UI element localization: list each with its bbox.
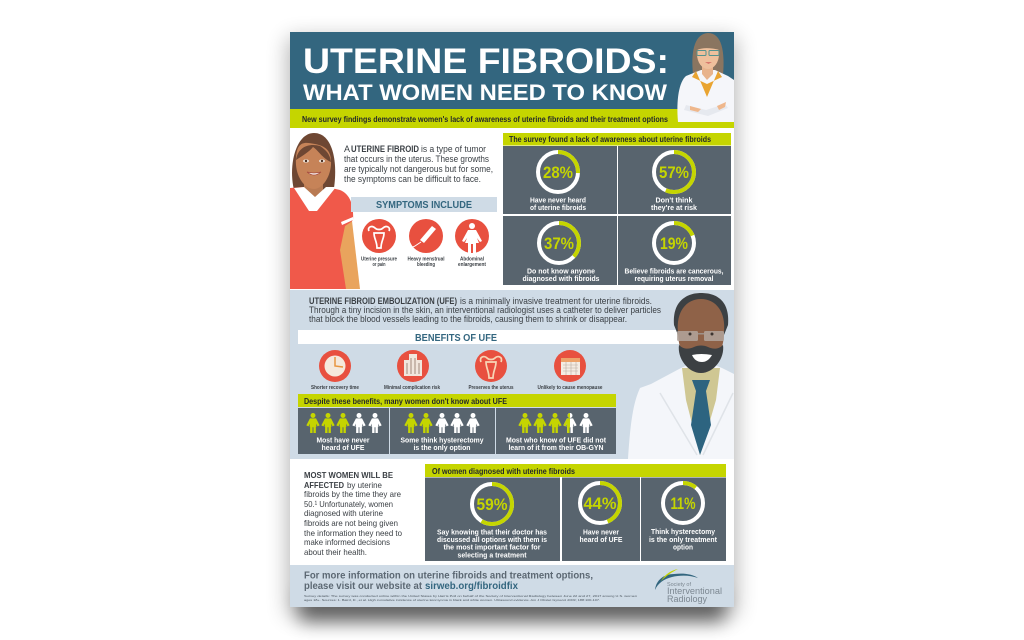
stat: 28%: of uterine fibroids <box>530 203 586 212</box>
stat tile: hysterectomy only option: is the only option <box>414 443 471 452</box>
icon: calendar <box>554 350 586 382</box>
panel: women diagnosed <box>425 464 726 561</box>
panel heading: Of women diagnosed with uterine fibroids <box>432 467 575 476</box>
illustration: woman in red dress <box>290 133 360 290</box>
title <box>303 42 669 105</box>
stat: 57%: Don't think <box>656 196 693 204</box>
stat: 11%: 11% <box>670 494 696 513</box>
icon: female figure <box>455 219 489 253</box>
illustration: doctor <box>628 293 734 459</box>
stat: 37% <box>503 216 617 285</box>
intro text: that occurs in the uterus. These growths <box>344 154 489 164</box>
survey footnote: ages 18+. Sources: 1. Baird, D., et al. High cumulative incidence of uterine leiomyoma in black and white women. Ultrasound evidence. Am J Obstet Gynecol 2003; 188:100-107. <box>304 598 600 602</box>
stat: 28%: 28% <box>543 163 573 182</box>
icon: uterus <box>475 350 507 382</box>
benefit: complication risk <box>384 350 440 391</box>
symptoms heading <box>351 197 497 212</box>
subtitle bar: New survey findings demonstrate women's lack of awareness of uterine fibroids and their treatment options <box>302 115 668 124</box>
call to action: For more information on uterine fibroids and treatment options, <box>304 570 593 582</box>
text: most women will be affected: 50.¹ Unfortunately, women <box>304 499 393 509</box>
intro text: is a type of tumor <box>421 144 486 154</box>
stat: 28% <box>503 146 617 214</box>
stat: 19%: 19% <box>660 234 688 253</box>
UFE description: Through a tiny incision in the skin, an interventional radiologist uses a catheter to deliver particles <box>309 305 661 315</box>
panel: UFE background <box>290 290 734 459</box>
stat: 59%: 59% <box>476 495 508 514</box>
benefits heading <box>298 330 680 344</box>
benefit: menopause: Unlikely to cause menopause <box>538 385 603 391</box>
stat tile: hysterectomy only option: Some think hysterectomy <box>400 436 484 444</box>
stat tile: never heard of UFE <box>298 408 389 454</box>
text: most women will be affected: make informed decisions <box>304 537 390 547</box>
UFE description: UTERINE FIBROID EMBOLIZATION (UFE) <box>309 296 457 306</box>
symptom: uterine pressure: or pain <box>372 262 386 268</box>
text: most women will be affected: fibroids are not being given <box>304 518 398 528</box>
stat: 11%: Think hysterectomy <box>651 527 716 536</box>
stat: 11%: option <box>673 542 693 552</box>
benefit: preserves uterus: Preserves the uterus <box>468 385 514 391</box>
text: most women will be affected: by uterine <box>347 480 382 490</box>
text: most women will be affected: the information they need to <box>304 528 402 538</box>
panel heading <box>503 133 731 146</box>
stat: 11%: is the only treatment <box>649 535 717 544</box>
text: most women will be affected: AFFECTED <box>304 480 344 490</box>
stat tile: never heard of UFE: Most have never <box>316 436 370 444</box>
panel heading: Despite these benefits, many women don't know about UFE <box>304 397 508 406</box>
illustration: woman in lab coat <box>677 33 734 122</box>
stat: 37%: 37% <box>544 234 574 253</box>
benefit: complication risk: Minimal complication risk <box>384 385 440 391</box>
title: WHAT WOMEN NEED TO KNOW <box>303 80 667 105</box>
UFE description <box>309 296 661 324</box>
benefit: recovery time <box>311 350 359 391</box>
panel heading <box>425 464 726 477</box>
stat: 57%: 57% <box>659 163 689 182</box>
stat: 57% <box>618 146 731 214</box>
intro text: the symptoms can be difficult to face. <box>344 174 481 184</box>
survey footnote: Survey details: The survey was conducted online within the United States by Harris Poll on behalf of the Society of Interventional Radiology between June 22 and 27, 2017 among U.S. women <box>304 594 637 598</box>
stat tile: hysterectomy only option <box>390 408 495 454</box>
symptom: abdominal enlargement: Abdominal <box>460 256 485 262</box>
stat: 44% <box>562 478 640 561</box>
symptom: uterine pressure: Uterine pressure <box>361 256 397 262</box>
symptom: uterine pressure <box>361 219 397 268</box>
stat tile: not from OB-GYN <box>496 408 616 454</box>
stat: 37%: Do not know anyone <box>527 266 595 276</box>
stat: 59%: the most important factor for <box>444 542 541 552</box>
panel heading: The survey found a lack of awareness about uterine fibroids <box>509 135 711 144</box>
symptom: heavy bleeding: bleeding <box>417 262 435 268</box>
UFE description: that block the blood vessels leading to the fibroids, causing them to shrink or disappear. <box>309 314 627 324</box>
symptom: abdominal enlargement: enlargement <box>458 262 486 268</box>
logo: Society of Interventional Radiology: Society of <box>667 582 692 588</box>
benefit: menopause <box>538 350 603 391</box>
stat: 28%: Have never heard <box>530 196 586 204</box>
UFE description: is a minimally invasive treatment for uterine fibroids. <box>460 296 652 306</box>
intro text <box>344 144 493 184</box>
panel heading <box>298 394 616 407</box>
stat: 19%: requiring uterus removal <box>634 274 714 283</box>
stat: 57%: they're at risk <box>651 203 698 212</box>
title: UTERINE FIBROIDS: <box>303 42 669 81</box>
stat: 19% <box>618 216 731 285</box>
text: most women will be affected: diagnosed with uterine <box>304 508 383 518</box>
icon: tampon <box>409 219 443 253</box>
intro text: A <box>344 144 350 154</box>
stat: 59% <box>425 478 560 561</box>
text: most women will be affected: fibroids by the time they are <box>304 489 401 499</box>
symptom: heavy bleeding: Heavy menstrual <box>408 256 445 262</box>
symptom: heavy bleeding <box>408 219 445 268</box>
symptoms heading: SYMPTOMS INCLUDE <box>376 199 472 211</box>
call to action: sirweb.org/fibroidfix <box>425 580 518 592</box>
stat: 59%: selecting a treatment <box>458 550 527 560</box>
logo: Society of Interventional Radiology <box>655 569 722 605</box>
stat: 44%: Have never <box>583 528 619 536</box>
icon: uterus <box>362 219 396 253</box>
footer <box>290 565 734 607</box>
icon: hospital <box>397 350 429 382</box>
stat: 19%: Believe fibroids are cancerous, <box>624 266 724 276</box>
stat: 44%: 44% <box>584 494 616 513</box>
poster background <box>290 32 734 607</box>
logo: Society of Interventional Radiology: Radiology <box>667 594 707 605</box>
stat tile: not from OB-GYN: learn of it from their OB-GYN <box>508 443 604 452</box>
stat: 59%: Say knowing that their doctor has <box>437 528 547 536</box>
panel: survey awareness <box>503 133 731 285</box>
logo: Society of Interventional Radiology: Interventional <box>667 586 722 597</box>
stat tile: not from OB-GYN: Most who know of UFE did not <box>506 436 606 444</box>
stat: 59%: discussed all options with them is <box>437 535 547 544</box>
subtitle bar <box>290 109 734 128</box>
benefit: recovery time: Shorter recovery time <box>311 385 359 391</box>
text: most women will be affected: about their health. <box>304 547 367 557</box>
text: most women will be affected <box>304 470 402 557</box>
icon: clock <box>319 350 351 382</box>
panel: UFE awareness <box>298 394 616 454</box>
stat: 44%: heard of UFE <box>580 535 622 544</box>
stat tile: never heard of UFE: heard of UFE <box>322 443 364 452</box>
symptom: abdominal enlargement <box>455 219 489 268</box>
benefit: preserves uterus <box>468 350 514 391</box>
header banner <box>290 32 734 109</box>
text: most women will be affected: MOST WOMEN WILL BE <box>304 470 393 480</box>
survey footnote <box>304 594 637 602</box>
intro text: are typically not dangerous but for some, <box>344 164 493 174</box>
benefits heading: BENEFITS OF UFE <box>415 332 497 344</box>
intro text: UTERINE FIBROID <box>351 144 419 154</box>
poster drop shadow <box>288 38 736 622</box>
stat: 37%: diagnosed with fibroids <box>522 274 600 283</box>
call to action: please visit our website at <box>304 580 422 592</box>
stat: 11% <box>641 478 726 561</box>
call to action <box>304 570 593 592</box>
